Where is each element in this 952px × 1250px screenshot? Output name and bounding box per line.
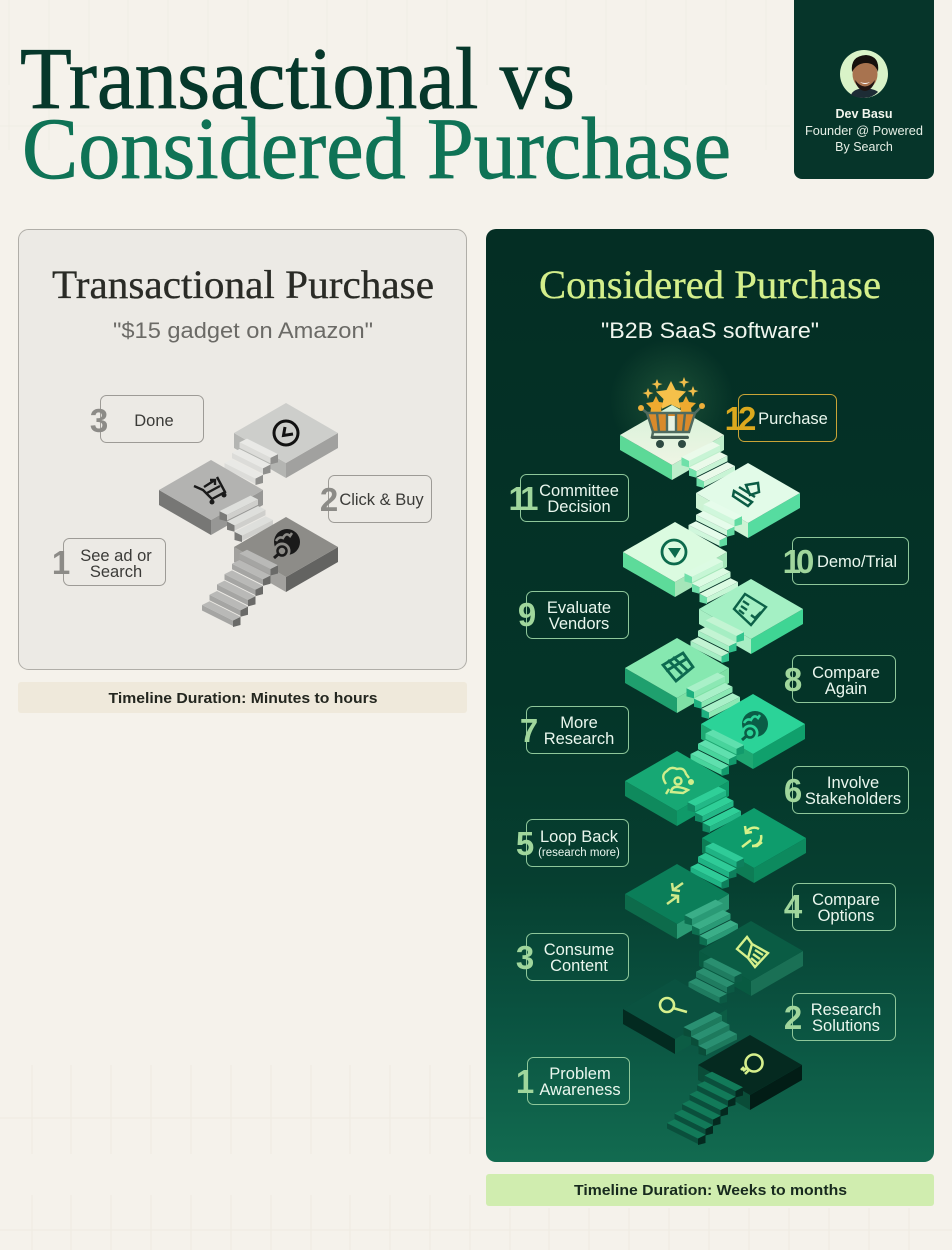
label: step 12 Purchase: Purchase bbox=[758, 410, 828, 428]
label: step 1 Problem Awareness bbox=[516, 1058, 630, 1104]
label: step 1 See ad or Search: 1 bbox=[52, 544, 70, 581]
label: step 1 See ad or Search bbox=[52, 538, 166, 586]
label: step 11 Committee Decision: Committee bbox=[539, 482, 619, 500]
label: step 5 Loop Back: Loop Back bbox=[540, 828, 619, 846]
label: step 8 Compare Again: Compare bbox=[812, 664, 880, 682]
heading: considered purchase: Considered Purchase bbox=[539, 262, 881, 307]
staircase: considered journey bbox=[620, 377, 806, 1145]
platform: step 7 bbox=[701, 694, 805, 769]
label: step 2 Click and Buy: 2 bbox=[320, 481, 338, 518]
icon: magnifier bbox=[660, 998, 687, 1012]
platform: step 11 bbox=[696, 463, 800, 538]
label: step 5 Loop Back: 5 bbox=[516, 825, 534, 862]
label: step 2 Research Solutions: Solutions bbox=[812, 1017, 880, 1035]
subheading: gadget example: "$15 gadget on Amazon" bbox=[113, 318, 373, 343]
label: step 1 See ad or Search: See ad or bbox=[80, 547, 152, 565]
icon: checklist bbox=[734, 594, 766, 625]
label: step 3 Done: 3 bbox=[90, 402, 108, 439]
platform: step 12 bbox=[620, 405, 724, 480]
label: step 6 Involve Stakeholders: Involve bbox=[827, 774, 879, 792]
platform: step 2 bbox=[159, 460, 263, 535]
icon: clock bbox=[274, 421, 298, 445]
icon: search globe bbox=[274, 529, 300, 560]
label: step 1 Problem Awareness: 1 bbox=[516, 1063, 534, 1100]
platform: step 4 bbox=[625, 864, 729, 939]
platform: step 1 bbox=[698, 1035, 802, 1110]
staircase: transactional journey bbox=[159, 403, 338, 627]
icon: cart with stars bbox=[638, 377, 705, 448]
label: step 8 Compare Again bbox=[784, 656, 896, 702]
label: step 9 Evaluate Vendors: 9 bbox=[518, 596, 536, 633]
label: step 5 Loop Back: (research more) bbox=[538, 847, 620, 859]
platform: step 2 bbox=[623, 979, 727, 1054]
platform: step 1 bbox=[234, 517, 338, 592]
author card: Dev Basu bbox=[836, 107, 892, 121]
label: step 6 Involve Stakeholders bbox=[784, 766, 908, 814]
platform: step 3 bbox=[699, 921, 803, 996]
label: step 9 Evaluate Vendors: Vendors bbox=[549, 615, 609, 633]
platform: step 9 bbox=[699, 579, 803, 654]
label: step 2 Research Solutions: Research bbox=[811, 1001, 881, 1019]
panel: transactional purchase bbox=[18, 230, 466, 670]
icon: search globe green bbox=[742, 711, 768, 742]
label: step 1 See ad or Search: Search bbox=[90, 563, 142, 581]
caption: transactional timeline: Timeline Duration: Minutes to hours bbox=[108, 691, 378, 707]
platform: step 8 bbox=[625, 638, 729, 713]
heading: transactional purchase: Transactional Purchase bbox=[52, 262, 434, 307]
platform: step 3 bbox=[234, 403, 338, 478]
label: step 9 Evaluate Vendors: Evaluate bbox=[547, 599, 611, 617]
icon: light bulb bbox=[741, 1054, 762, 1074]
icon: compare arrows bbox=[667, 883, 683, 904]
label: step 10 Demo/Trial: Demo/Trial bbox=[817, 553, 897, 571]
label: step 5 Loop Back bbox=[516, 820, 628, 866]
label: step 2 Click and Buy bbox=[320, 476, 432, 522]
label: step 7 More Research: More bbox=[560, 714, 598, 732]
panel: considered purchase bbox=[486, 229, 934, 1162]
label: step 4 Compare Options: 4 bbox=[784, 888, 803, 925]
label: step 3 Consume Content: Consume bbox=[544, 941, 614, 959]
label: step 12 Purchase bbox=[725, 394, 836, 442]
author card: By Search bbox=[835, 140, 893, 154]
label: step 11 Committee Decision: 11 bbox=[509, 480, 538, 517]
label: step 4 Compare Options: Options bbox=[818, 907, 874, 925]
label: step 8 Compare Again: 8 bbox=[784, 661, 802, 698]
label: step 12 Purchase: 12 bbox=[725, 400, 756, 437]
label: step 4 Compare Options bbox=[784, 884, 896, 930]
caption: considered timeline: Timeline Duration: Weeks to months bbox=[574, 1183, 847, 1199]
title: Transactional vs bbox=[20, 31, 575, 128]
label: step 10 Demo/Trial: 10 bbox=[783, 543, 813, 580]
label: step 4 Compare Options: Compare bbox=[812, 891, 880, 909]
label: step 3 Done bbox=[90, 396, 204, 442]
label: step 2 Research Solutions bbox=[784, 994, 896, 1040]
icon: stakeholders bbox=[663, 768, 693, 794]
icon: loop bbox=[742, 826, 762, 847]
label: step 3 Consume Content bbox=[516, 934, 628, 980]
icon: author avatar bbox=[840, 50, 888, 98]
label: step 11 Committee Decision: Decision bbox=[547, 498, 611, 516]
label: step 7 More Research: 7 bbox=[520, 712, 538, 749]
icon: book bbox=[737, 937, 768, 967]
title bbox=[20, 31, 731, 198]
label: step 10 Demo/Trial bbox=[783, 538, 908, 584]
label: step 9 Evaluate Vendors bbox=[518, 592, 628, 638]
label: step 3 Done: Done bbox=[134, 412, 174, 430]
icon: cart bbox=[194, 477, 226, 504]
platform: step 10 bbox=[623, 522, 727, 597]
author card bbox=[794, 0, 934, 179]
label: step 8 Compare Again: Again bbox=[825, 680, 867, 698]
label: step 1 Problem Awareness: Awareness bbox=[539, 1081, 621, 1099]
platform: step 6 bbox=[625, 751, 729, 826]
label: step 6 Involve Stakeholders: 6 bbox=[784, 772, 802, 809]
platform: step 5 bbox=[702, 808, 806, 883]
label: step 2 Click and Buy: Click & Buy bbox=[339, 491, 424, 509]
label: step 2 Research Solutions: 2 bbox=[784, 999, 802, 1036]
label: step 7 More Research bbox=[520, 706, 628, 754]
label: step 6 Involve Stakeholders: Stakeholders bbox=[805, 790, 901, 808]
icon: committee decision bbox=[733, 483, 759, 506]
icon: play bbox=[662, 540, 686, 564]
label: step 1 Problem Awareness: Problem bbox=[549, 1065, 611, 1083]
caption: transactional timeline bbox=[18, 682, 467, 713]
author card: Founder @ Powered bbox=[805, 124, 923, 138]
label: step 3 Consume Content: 3 bbox=[516, 939, 534, 976]
title: Considered Purchase bbox=[22, 101, 731, 198]
label: step 3 Consume Content: Content bbox=[550, 957, 608, 975]
caption: considered timeline bbox=[486, 1174, 934, 1206]
subheading: software example: "B2B SaaS software" bbox=[601, 318, 819, 343]
label: step 7 More Research: Research bbox=[544, 730, 614, 748]
icon: table bbox=[663, 653, 693, 681]
label: step 11 Committee Decision bbox=[509, 474, 628, 522]
